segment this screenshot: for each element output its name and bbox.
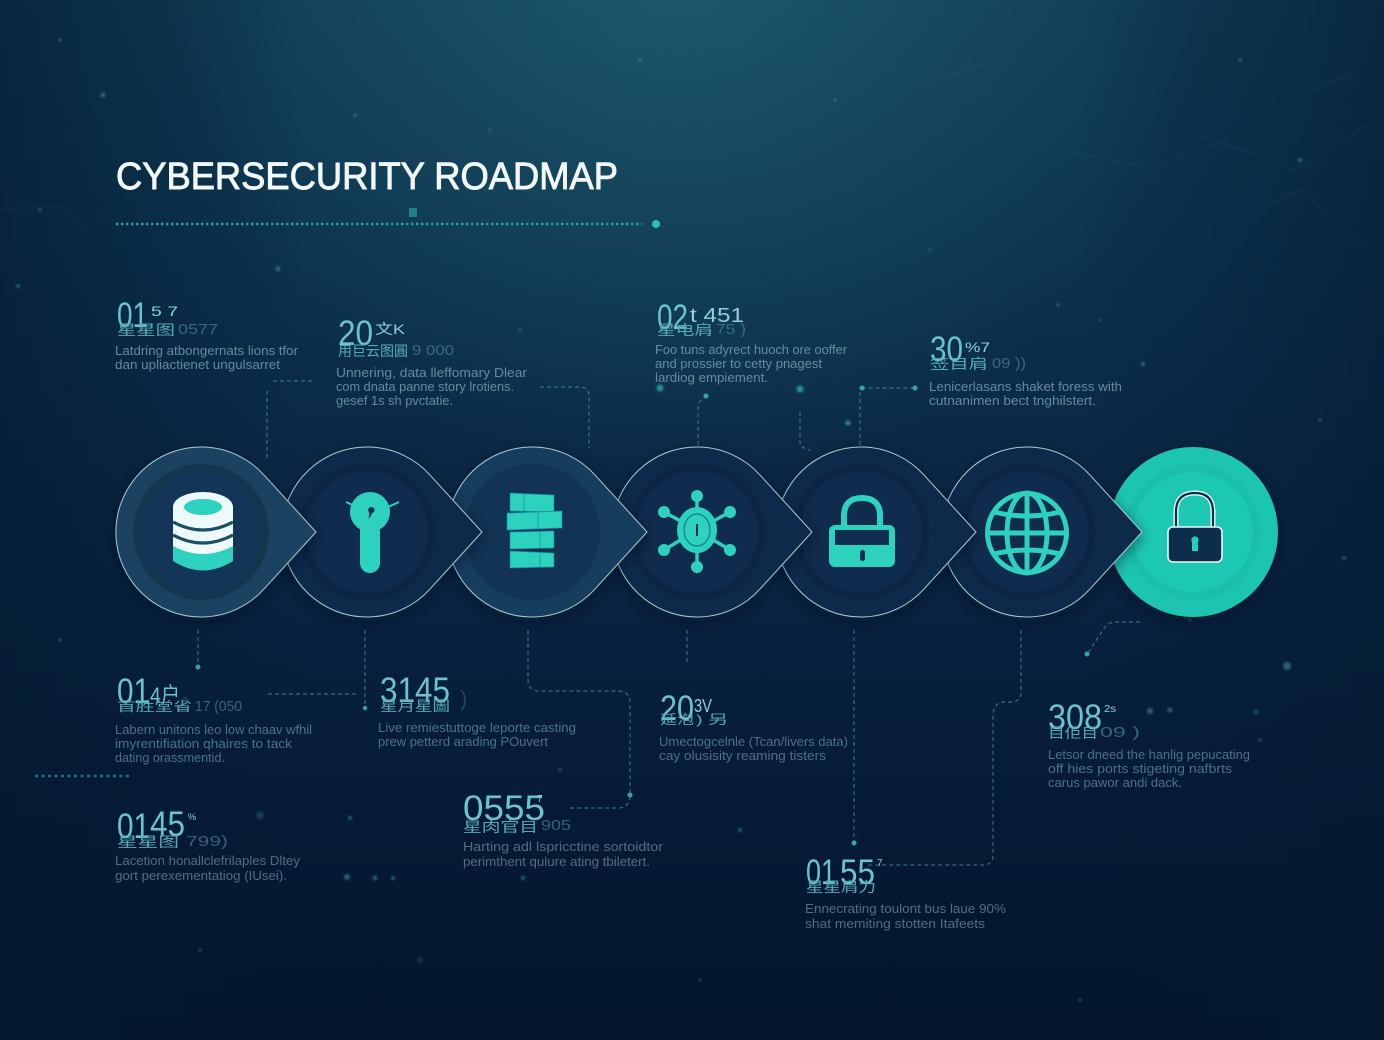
icon: padlock solid (829, 498, 895, 567)
milestone 1 text (115, 296, 298, 372)
milestone 5 text: 首胜堂省 (117, 699, 192, 714)
milestone 4 text: Lenicerlasans shaket foress with (929, 380, 1122, 394)
milestone 7 text: 延泡 (660, 712, 694, 727)
step 3: brick stack (447, 447, 647, 617)
milestone 8 text: 09 ) (1100, 724, 1140, 741)
milestone 5 text: 4户 (150, 683, 180, 708)
milestone 7 text: 3V (694, 696, 712, 716)
milestone 11 text: 7 (877, 858, 883, 869)
icon: network (658, 490, 736, 573)
milestone 10 text: 0555 (463, 789, 545, 828)
milestone 10 text: perimthent qulure ating tbiletert. (463, 855, 650, 869)
milestone 11 text (805, 853, 1006, 931)
milestone 7 text: 20 (660, 689, 694, 728)
milestone 2 text (336, 314, 527, 408)
step 5: padlock (776, 447, 976, 617)
milestone 11 text: 55 (840, 853, 875, 892)
milestone 7 text: ) 另 (696, 712, 728, 727)
milestone 3 text: 星电肩 (657, 322, 713, 338)
milestone 7 text (659, 689, 848, 763)
milestone 8 text: 308 (1048, 698, 1102, 737)
milestone 9 text: 星星图 (117, 834, 179, 850)
milestone 6 text: Live remiestuttoge leporte casting (378, 721, 576, 735)
milestone 8 text: 目佢目 (1048, 725, 1098, 741)
milestone 5 text: dating orassmentid. (115, 751, 225, 765)
milestone 3 text: t 451 (690, 305, 744, 327)
milestone 9 text: Lacetion honallclefrilaples Dltey (115, 854, 301, 868)
milestone 5 text: Labern unitons leo low chaav wfhil (115, 723, 312, 737)
milestone 9 text: 01 (117, 807, 150, 846)
milestone 2 text: 文K (375, 321, 406, 337)
step 6: globe (942, 447, 1142, 617)
icon: padlock outlined (1168, 493, 1222, 562)
milestone 10 text (463, 789, 663, 869)
milestone 1 text: 01 (117, 296, 148, 335)
title: CYBERSECURITY ROADMAP (116, 156, 618, 198)
milestone 1 text: 5 7 (151, 303, 178, 319)
step 7: final lock (teal) (1108, 447, 1278, 617)
milestone 10 text: 905 (541, 817, 571, 834)
step 4: network hub (612, 447, 812, 617)
milestone 8 text (1048, 698, 1250, 790)
step 1: database (116, 447, 316, 617)
milestone 7 text: cay olusisity reaming tisters (659, 749, 826, 763)
milestone 6 text: 3145 (380, 671, 450, 710)
milestone 3 text: lardiog empiement. (655, 371, 768, 385)
milestone 4 text: cutnanimen bect tnghilstert. (929, 394, 1096, 408)
milestone 10 text: 星肉官目 (463, 819, 538, 835)
milestone 6 text: prew petterd arading POuvert (378, 735, 549, 749)
milestone 10 text: Harting adl lspricctine sortoidtor (463, 840, 663, 854)
milestone 4 text: 09 )) (992, 355, 1026, 372)
milestone 3 text: 75 ) (716, 321, 746, 338)
milestone 7 text: Umectogcelnle (Tcan/livers data) (659, 735, 848, 749)
milestone 9 text: 799) (186, 833, 228, 850)
milestone 2 text: Unnering, data lleffomary Dlear (336, 366, 527, 380)
milestone 1 text: 星星图 (117, 322, 175, 338)
milestone 3 text: 02 (657, 298, 688, 337)
milestone 9 text: 45 (150, 805, 185, 844)
milestone 9 text (115, 805, 301, 883)
milestone 4 text: 签目肩 (930, 356, 988, 372)
milestone 5 text: imyrentifiation qhaires to tack (115, 737, 293, 751)
milestone 2 text: 20 (338, 314, 373, 353)
milestone 11 text: 01 (806, 853, 836, 892)
milestone 6 text: 星月星圖 (380, 698, 450, 714)
milestone 4 text: 30 (930, 330, 963, 369)
milestone 6 text: ) (460, 686, 467, 711)
milestone 1 text: Latdring atbongernats lions tfor (115, 344, 298, 358)
milestone 8 text: 2s (1104, 704, 1116, 715)
step 2: keyhole key (282, 447, 482, 617)
icon: key (346, 492, 399, 573)
milestone 3 text (655, 298, 847, 385)
milestone 11 text: shat memiting stotten Itafeets (805, 917, 985, 931)
milestone 2 text: gesef 1s sh pvctatie. (336, 394, 453, 408)
milestone 3 text: Foo tuns adyrect huoch ore ooffer (655, 343, 847, 357)
icon: bricks (507, 493, 562, 568)
milestone 10 text: 7 (537, 794, 543, 805)
milestone 11 text: Ennecrating toulont bus laue 90% (805, 902, 1006, 916)
milestone 5 text: 17 (050 (195, 698, 242, 715)
milestone 5 text: 01 (117, 672, 150, 711)
milestone 5 text (115, 672, 312, 765)
milestone 11 text: 星星肩力 (806, 879, 876, 895)
milestone 4 text: %7 (965, 339, 990, 355)
milestone 9 text: gort perexementatiog (IUsei). (115, 869, 287, 883)
milestone 2 text: com dnata panne story lrotiens. (336, 380, 514, 394)
icon: database (173, 492, 233, 570)
milestone 1 text: 0577 (178, 321, 218, 338)
milestone 4 text (929, 330, 1122, 408)
milestone 8 text: carus pawor andi dack. (1048, 776, 1182, 790)
milestone 6 text (378, 671, 576, 749)
milestone 2 text: 用巨云图圓 (338, 343, 408, 359)
milestone 8 text: Letsor dneed the hanlig pepucating (1048, 748, 1250, 762)
milestone 3 text: and prossier to cetty pnagest (655, 357, 823, 371)
milestone 8 text: off hies ports stigeting nafbrts (1048, 762, 1232, 776)
milestone 2 text: 9 000 (412, 342, 454, 359)
title divider: dotted line with nodes (116, 208, 660, 228)
milestone 9 text: % (188, 812, 196, 822)
icon: globe (987, 493, 1067, 573)
milestone 1 text: dan upliactienet ungulsarret (115, 358, 281, 372)
dashed connectors (35, 381, 1140, 865)
